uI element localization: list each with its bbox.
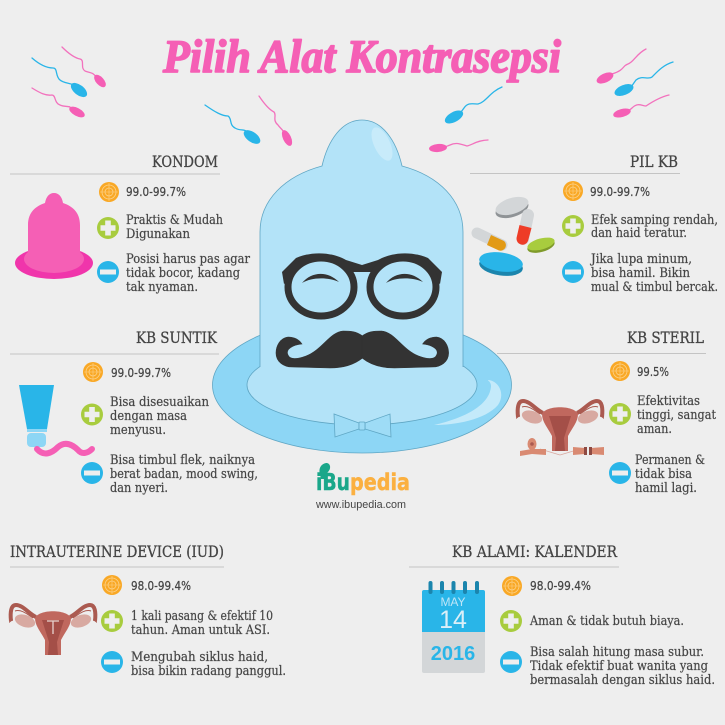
cons: tidak bocor, kadang bbox=[126, 266, 240, 281]
pros: Aman & tidak butuh biaya. bbox=[529, 614, 684, 629]
sperm: pink lower left bbox=[32, 88, 86, 120]
sperm: pink centre right bbox=[429, 140, 488, 153]
eye left bbox=[302, 274, 339, 283]
pros bbox=[101, 609, 273, 638]
sperm: pink top right bbox=[595, 49, 646, 86]
panel: kondom bbox=[10, 152, 251, 295]
efficacy bbox=[563, 181, 650, 201]
logo: ibupedia bbox=[315, 463, 410, 511]
efficacy bbox=[502, 576, 591, 596]
pros: menyusu. bbox=[110, 423, 166, 438]
cons: bisa bikin radang panggul. bbox=[131, 664, 286, 679]
icon: sterilised uterus bbox=[516, 401, 604, 456]
glasses bbox=[282, 253, 442, 316]
cons: tidak bisa bbox=[635, 467, 692, 482]
tip highlight bbox=[367, 124, 397, 164]
sperm: blue top left bbox=[32, 58, 90, 100]
pros: Digunakan bbox=[126, 227, 191, 242]
brim highlight bbox=[434, 380, 501, 425]
efficacy bbox=[83, 362, 171, 382]
efficacy: 99.0-99.7% bbox=[126, 184, 186, 199]
pros bbox=[562, 213, 718, 241]
icon: uterus with iud bbox=[9, 605, 97, 655]
logo url: www.ibupedia.com bbox=[315, 499, 406, 511]
sperm: pink top left bbox=[62, 47, 108, 89]
pros: 1 kali pasang & efektif 10 bbox=[131, 609, 273, 624]
sperm: pink lower right bbox=[612, 95, 669, 119]
panel: kb steril bbox=[497, 328, 717, 496]
cons: tak nyaman. bbox=[126, 280, 198, 295]
cons: Posisi harus pas agar bbox=[126, 252, 251, 267]
pros: Efektivitas bbox=[637, 394, 700, 409]
heading: KB SUNTIK bbox=[136, 328, 218, 347]
heading: INTRAUTERINE DEVICE (IUD) bbox=[10, 542, 224, 561]
icon: tube bbox=[19, 385, 92, 453]
efficacy bbox=[99, 182, 186, 202]
heading: KB STERIL bbox=[627, 328, 704, 347]
cons bbox=[500, 645, 715, 688]
panel: kb suntik bbox=[10, 328, 258, 496]
panel: iud bbox=[9, 542, 286, 679]
sperm: blue centre left bbox=[205, 105, 263, 147]
efficacy: 99.5% bbox=[637, 364, 669, 379]
pros: dan haid teratur. bbox=[591, 226, 687, 241]
eye right bbox=[386, 274, 423, 283]
heading: PIL KB bbox=[630, 152, 678, 171]
pros bbox=[97, 213, 224, 242]
condom body bbox=[260, 120, 463, 368]
cons bbox=[81, 453, 258, 496]
pros bbox=[609, 394, 717, 437]
efficacy bbox=[610, 361, 669, 381]
heading: KONDOM bbox=[152, 152, 218, 171]
efficacy: 98.0-99.4% bbox=[131, 578, 191, 593]
icon: calendar: MAY bbox=[440, 595, 466, 609]
efficacy: 98.0-99.4% bbox=[530, 578, 591, 593]
cons: Bisa salah hitung masa subur. bbox=[530, 645, 704, 660]
logo figure bbox=[319, 463, 330, 479]
cons: Mengubah siklus haid, bbox=[131, 650, 268, 665]
pros: Bisa disesuaikan bbox=[110, 395, 210, 410]
cons bbox=[562, 252, 718, 295]
efficacy: 99.0-99.7% bbox=[111, 365, 171, 380]
cons bbox=[101, 650, 286, 679]
body outline bbox=[260, 120, 463, 367]
pros: tahun. Aman untuk ASI. bbox=[131, 623, 270, 638]
icon: calendar: 2016 bbox=[431, 643, 475, 665]
logo wordmark: iBu bbox=[316, 470, 350, 496]
cons bbox=[97, 252, 251, 295]
logo wordmark orange: pedia bbox=[350, 470, 410, 496]
condom brim bbox=[212, 317, 512, 453]
title: Pilih Alat Kontrasepsi bbox=[162, 31, 561, 83]
pros: aman. bbox=[637, 422, 672, 437]
pros bbox=[500, 610, 684, 632]
panel: kb alami kalender bbox=[409, 542, 715, 688]
decorative sperm group bbox=[32, 47, 673, 153]
moustache bbox=[276, 331, 449, 368]
pros: Praktis & Mudah bbox=[126, 213, 224, 228]
cons: hamil lagi. bbox=[635, 481, 697, 496]
icon: calendar: 14 bbox=[439, 606, 467, 634]
sperm: blue centre right bbox=[443, 87, 502, 126]
efficacy: 99.0-99.7% bbox=[590, 184, 650, 199]
central condom character bbox=[212, 120, 512, 453]
icon: pills bbox=[477, 193, 556, 278]
pros: dengan masa bbox=[110, 409, 187, 424]
cons: Jika lupa minum, bbox=[589, 252, 692, 267]
bow tie bbox=[334, 414, 391, 437]
cons: bisa hamil. Bikin bbox=[591, 266, 691, 281]
icon: pink condom bbox=[15, 193, 93, 279]
icon: calendar bbox=[422, 583, 485, 673]
heading: KB ALAMI: KALENDER bbox=[452, 542, 618, 561]
pros bbox=[81, 395, 210, 438]
cons: Permanen & bbox=[635, 453, 705, 468]
cons: Bisa timbul flek, naiknya bbox=[110, 453, 255, 468]
inner brim bbox=[247, 345, 477, 425]
cons bbox=[609, 453, 705, 496]
sperm: pink centre left bbox=[259, 96, 294, 147]
cons: berat badan, mood swing, bbox=[110, 467, 258, 482]
sperm: blue top right bbox=[613, 62, 673, 98]
efficacy bbox=[102, 575, 191, 595]
panel: pil kb bbox=[470, 152, 718, 295]
cons: dan nyeri. bbox=[110, 481, 168, 496]
